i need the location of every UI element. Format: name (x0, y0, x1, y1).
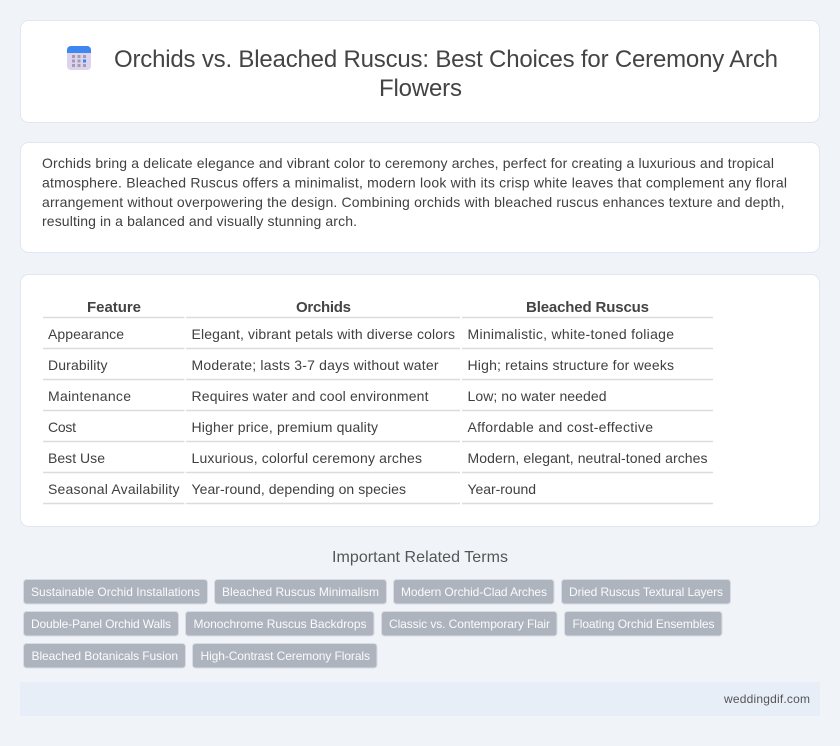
table row: appearance: Appearance (48, 326, 124, 342)
table header (87, 299, 649, 316)
title (114, 46, 778, 102)
tags: related terms: Monochrome Ruscus Backdrops (194, 617, 366, 631)
table row: maintenance: Low; no water needed (468, 388, 606, 404)
panel: comparison table (20, 274, 820, 526)
table row: cost: Higher price, premium quality (192, 419, 378, 435)
table row: best use (48, 450, 708, 466)
table row: maintenance (48, 388, 606, 404)
table row: durability: Durability (48, 357, 108, 373)
tags: related terms: Bleached Ruscus Minimalism (222, 585, 379, 599)
text block: introduction: Orchids bring a delicate elegance and vibrant color to ceremony arches, perfect for creating a luxurious and tropical (42, 155, 774, 171)
table row: cost (48, 419, 653, 435)
table row: seasonal availability: Seasonal Availability (48, 481, 180, 497)
panel: introduction (20, 142, 820, 252)
table row: cost: Affordable and cost-effective (468, 419, 653, 435)
text block: introduction: resulting in a balanced and visually stunning arch. (42, 213, 357, 229)
table header: Feature (87, 299, 141, 316)
footer: site name: weddingdif.com (723, 692, 810, 706)
table row: maintenance: Requires water and cool environment (192, 388, 429, 404)
table row: durability (48, 357, 674, 373)
table row: seasonal availability: Year-round (468, 481, 536, 497)
tags: related terms: Modern Orchid-Clad Arches (401, 585, 547, 599)
table row: best use: Best Use (48, 450, 105, 466)
tags: related terms: Floating Orchid Ensembles (572, 617, 714, 631)
tags: related terms: Classic vs. Contemporary Flair (389, 617, 550, 631)
table row: durability: Moderate; lasts 3-7 days without water (192, 357, 439, 373)
icon: calendar (67, 46, 91, 70)
table row: best use: Modern, elegant, neutral-toned arches (468, 450, 708, 466)
table header: Orchids (296, 299, 351, 316)
table row: seasonal availability: Year-round, depending on species (192, 481, 406, 497)
tags: related terms: Bleached Botanicals Fusion (32, 649, 178, 663)
table row: appearance (48, 326, 674, 342)
tags: related terms: Dried Ruscus Textural Layers (569, 585, 723, 599)
text block: introduction: atmosphere. Bleached Ruscus offers a minimalist, modern look with its crisp white leaves that complement any floral (42, 174, 787, 190)
table row: appearance: Minimalistic, white-toned foliage (468, 326, 674, 342)
tags: related terms: Sustainable Orchid Installations (31, 585, 200, 599)
title: Flowers (379, 75, 462, 102)
table row: seasonal availability (48, 481, 536, 497)
footer band (20, 682, 820, 716)
table header: Bleached Ruscus (526, 299, 649, 316)
table row: cost: Cost (48, 419, 76, 435)
heading: important related terms: Important Related Terms (332, 549, 508, 566)
table row: maintenance: Maintenance (48, 388, 131, 404)
text block: introduction (42, 155, 787, 229)
table row: durability: High; retains structure for weeks (468, 357, 674, 373)
table row: best use: Luxurious, colorful ceremony arches (192, 450, 422, 466)
panel: title header (20, 20, 820, 122)
tags: related terms: Double-Panel Orchid Walls (31, 617, 171, 631)
table row: appearance: Elegant, vibrant petals with diverse colors (192, 326, 455, 342)
title: Orchids vs. Bleached Ruscus: Best Choices for Ceremony Arch (114, 46, 778, 73)
text block: introduction: arrangement without overpowering the design. Combining orchids with bleached ruscus enhances texture and depth, (42, 194, 784, 210)
tags: related terms (24, 580, 730, 668)
tags: related terms: High-Contrast Ceremony Florals (200, 649, 370, 663)
